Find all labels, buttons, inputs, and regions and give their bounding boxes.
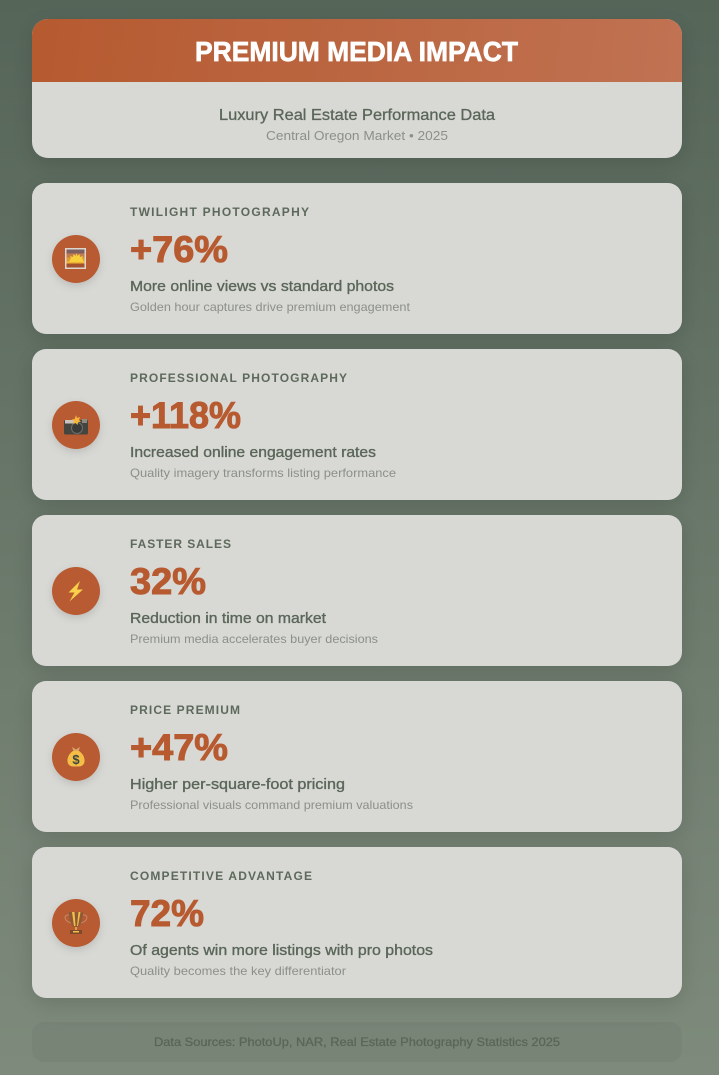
description: Increased online engagement rates (130, 444, 376, 461)
category label: PROFESSIONAL PHOTOGRAPHY (130, 371, 347, 385)
panel: competitive advantage (32, 847, 682, 998)
icon: camera with flash (52, 401, 100, 449)
icon: lightning bolt (52, 567, 100, 615)
header band (32, 19, 682, 82)
note: Premium media accelerates buyer decisions (130, 632, 378, 646)
icon: sunset picture (52, 235, 100, 283)
panel: twilight photography (32, 183, 682, 334)
statistic: +47% (130, 727, 228, 768)
statistic: +118% (130, 395, 241, 436)
note: Quality imagery transforms listing performance (130, 466, 396, 480)
note: Golden hour captures drive premium engagement (130, 300, 411, 314)
description: Of agents win more listings with pro photos (130, 942, 433, 959)
statistic: +76% (130, 229, 228, 270)
title: PREMIUM MEDIA IMPACT (195, 36, 518, 67)
market and year: Central Oregon Market • 2025 (266, 128, 448, 143)
note: Professional visuals command premium valuations (130, 798, 413, 812)
icon: money bag: $ (72, 752, 80, 767)
description: Reduction in time on market (130, 610, 327, 627)
icon: money bag (52, 733, 100, 781)
category label: FASTER SALES (130, 537, 231, 551)
panel: professional photography (32, 349, 682, 500)
description: Higher per-square-foot pricing (130, 776, 345, 793)
statistic: 32% (130, 561, 206, 602)
panel: footer sources (32, 1022, 682, 1062)
note: Quality becomes the key differentiator (130, 964, 346, 978)
category label: PRICE PREMIUM (130, 703, 240, 717)
category label: COMPETITIVE ADVANTAGE (130, 869, 312, 883)
panel: faster sales (32, 515, 682, 666)
statistic: 72% (130, 893, 204, 934)
subtitle: Luxury Real Estate Performance Data (219, 107, 495, 124)
description: More online views vs standard photos (130, 278, 394, 295)
sources text: Data Sources: PhotoUp, NAR, Real Estate Photography Statistics 2025 (154, 1035, 560, 1049)
category label: TWILIGHT PHOTOGRAPHY (130, 205, 309, 219)
panel: price premium (32, 681, 682, 832)
panel: header (32, 19, 682, 158)
icon: trophy (52, 899, 100, 947)
